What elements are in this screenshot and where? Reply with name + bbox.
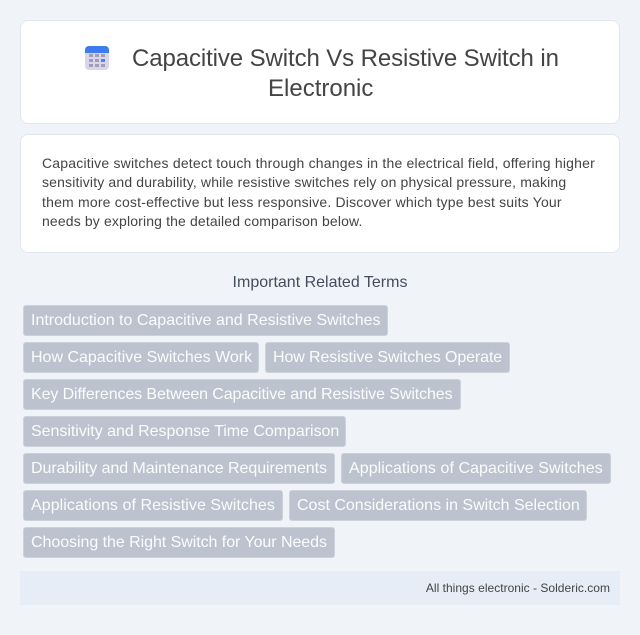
tag: Key Differences Between Capacitive and Resistive Switches bbox=[31, 386, 452, 403]
tag bbox=[341, 453, 611, 484]
description text: sensitivity and durability, while resistive switches rely on physical pressure, making bbox=[42, 174, 566, 190]
tag bbox=[23, 379, 461, 410]
title: Capacitive Switch Vs Resistive Switch in bbox=[132, 45, 559, 72]
tag bbox=[23, 490, 283, 521]
tag: How Resistive Switches Operate bbox=[273, 349, 502, 366]
tag bbox=[23, 416, 346, 447]
description text: Capacitive switches detect touch through changes in the electrical field, offering higher bbox=[42, 155, 595, 171]
description text: them more cost-effective but less responsive. Discover which type best suits Your bbox=[42, 194, 562, 210]
icon: calendar grid bbox=[85, 46, 109, 70]
title bbox=[132, 45, 559, 102]
tag: Applications of Capacitive Switches bbox=[349, 460, 603, 477]
tag bbox=[23, 305, 388, 336]
footer bar bbox=[20, 571, 620, 605]
tag bbox=[23, 527, 335, 558]
tag: Cost Considerations in Switch Selection bbox=[297, 497, 580, 514]
footer credit: All things electronic - Solderic.com bbox=[426, 581, 610, 595]
tag: Choosing the Right Switch for Your Needs bbox=[31, 534, 327, 551]
description text: needs by exploring the detailed comparison below. bbox=[42, 213, 363, 229]
section heading: Important Related Terms bbox=[233, 274, 407, 291]
description text bbox=[42, 155, 595, 229]
description card bbox=[20, 134, 620, 253]
tag: Durability and Maintenance Requirements bbox=[31, 460, 327, 477]
tag bbox=[23, 342, 259, 373]
tag: Applications of Resistive Switches bbox=[31, 497, 275, 514]
tag bbox=[23, 453, 335, 484]
header card bbox=[20, 20, 620, 124]
tag: Introduction to Capacitive and Resistive Switches bbox=[31, 312, 381, 329]
tag: How Capacitive Switches Work bbox=[31, 349, 252, 366]
tag bbox=[289, 490, 587, 521]
tag bbox=[265, 342, 510, 373]
tag list bbox=[23, 305, 611, 558]
tag: Sensitivity and Response Time Comparison bbox=[31, 423, 339, 440]
title: Electronic bbox=[268, 75, 373, 102]
